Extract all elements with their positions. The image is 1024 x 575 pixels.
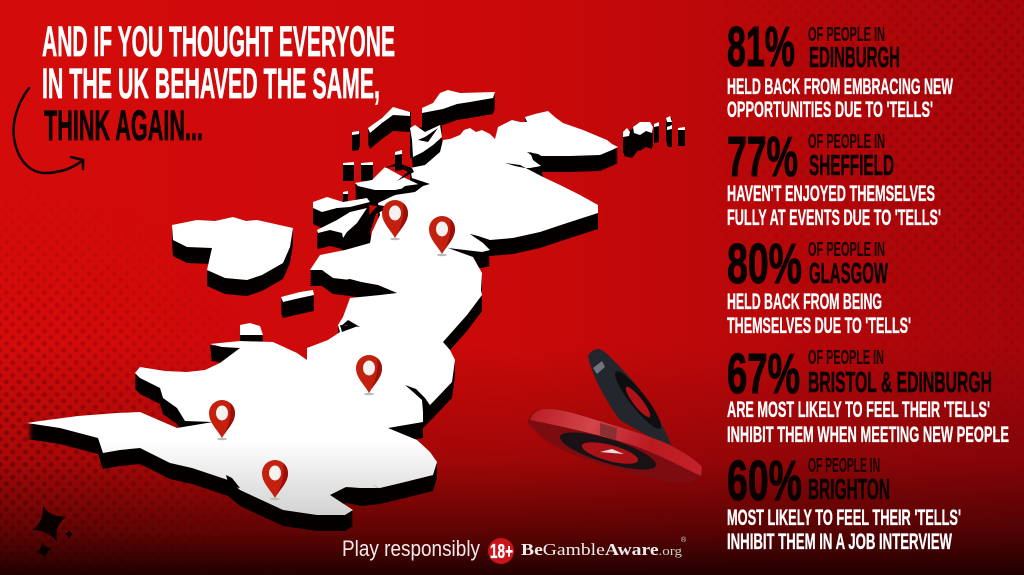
stat: 77% Sheffield: OF PEOPLE IN — [808, 131, 885, 153]
pin: Bristol — [209, 400, 235, 440]
dark chip — [588, 349, 672, 447]
stat: 80% Glasgow: GLASGOW — [809, 258, 888, 290]
stat: 77% Sheffield: 77% — [727, 125, 798, 189]
badge: 18+: 18+ — [490, 541, 513, 563]
stat: 80% Glasgow: 80% — [727, 232, 802, 296]
icon: sparkles — [32, 505, 73, 558]
badge: 18+ — [488, 538, 514, 564]
stat: 81% Edinburgh: 81% — [727, 15, 795, 79]
pin: Edinburgh — [429, 216, 455, 256]
infographic canvas: AND IF YOU THOUGHT EVERYONE — [42, 18, 395, 66]
pin: Sheffield — [356, 355, 382, 395]
headline — [42, 18, 395, 150]
footer: responsible gambling — [342, 536, 687, 564]
red chip — [528, 409, 702, 483]
map of the UK — [27, 90, 685, 531]
stat: 81% Edinburgh: EDINBURGH — [809, 42, 900, 74]
stat: 81% Edinburgh — [727, 15, 953, 122]
stat: 80% Glasgow — [727, 232, 911, 338]
map pins — [209, 200, 455, 500]
stat: 80% Glasgow: OF PEOPLE IN — [808, 239, 885, 261]
headline: IN THE UK BEHAVED THE SAME, — [42, 60, 380, 108]
stat: 60% Brighton — [727, 449, 961, 554]
stat: 60% Brighton: OF PEOPLE IN — [808, 455, 880, 477]
BeGambleAware logo: BeGamble Aware .org — [521, 540, 683, 559]
pin: Brighton — [262, 460, 288, 500]
stat: 77% Sheffield: SHEFFIELD — [809, 150, 894, 182]
play responsibly text: Play responsibly — [342, 536, 480, 561]
stat: 77% Sheffield — [727, 125, 941, 230]
headline: THINK AGAIN... — [44, 102, 203, 150]
pin: Glasgow — [382, 200, 408, 240]
stat: 60% Brighton: BRIGHTON — [808, 474, 890, 506]
icon: poker chips — [528, 349, 702, 483]
stat: 81% Edinburgh: OF PEOPLE IN — [808, 24, 885, 46]
registered mark: ® — [681, 536, 687, 544]
stat: 67% Bristol and Edinburgh: OF PEOPLE IN — [808, 347, 884, 369]
stat: 67% Bristol and Edinburgh: 67% — [727, 342, 800, 406]
stat: 67% Bristol and Edinburgh — [727, 342, 1009, 447]
stat: 60% Brighton: 60% — [727, 449, 802, 513]
icon: curved arrow — [14, 88, 83, 173]
stat: 80% Glasgow: HELD BACK FROM BEING — [727, 289, 882, 314]
